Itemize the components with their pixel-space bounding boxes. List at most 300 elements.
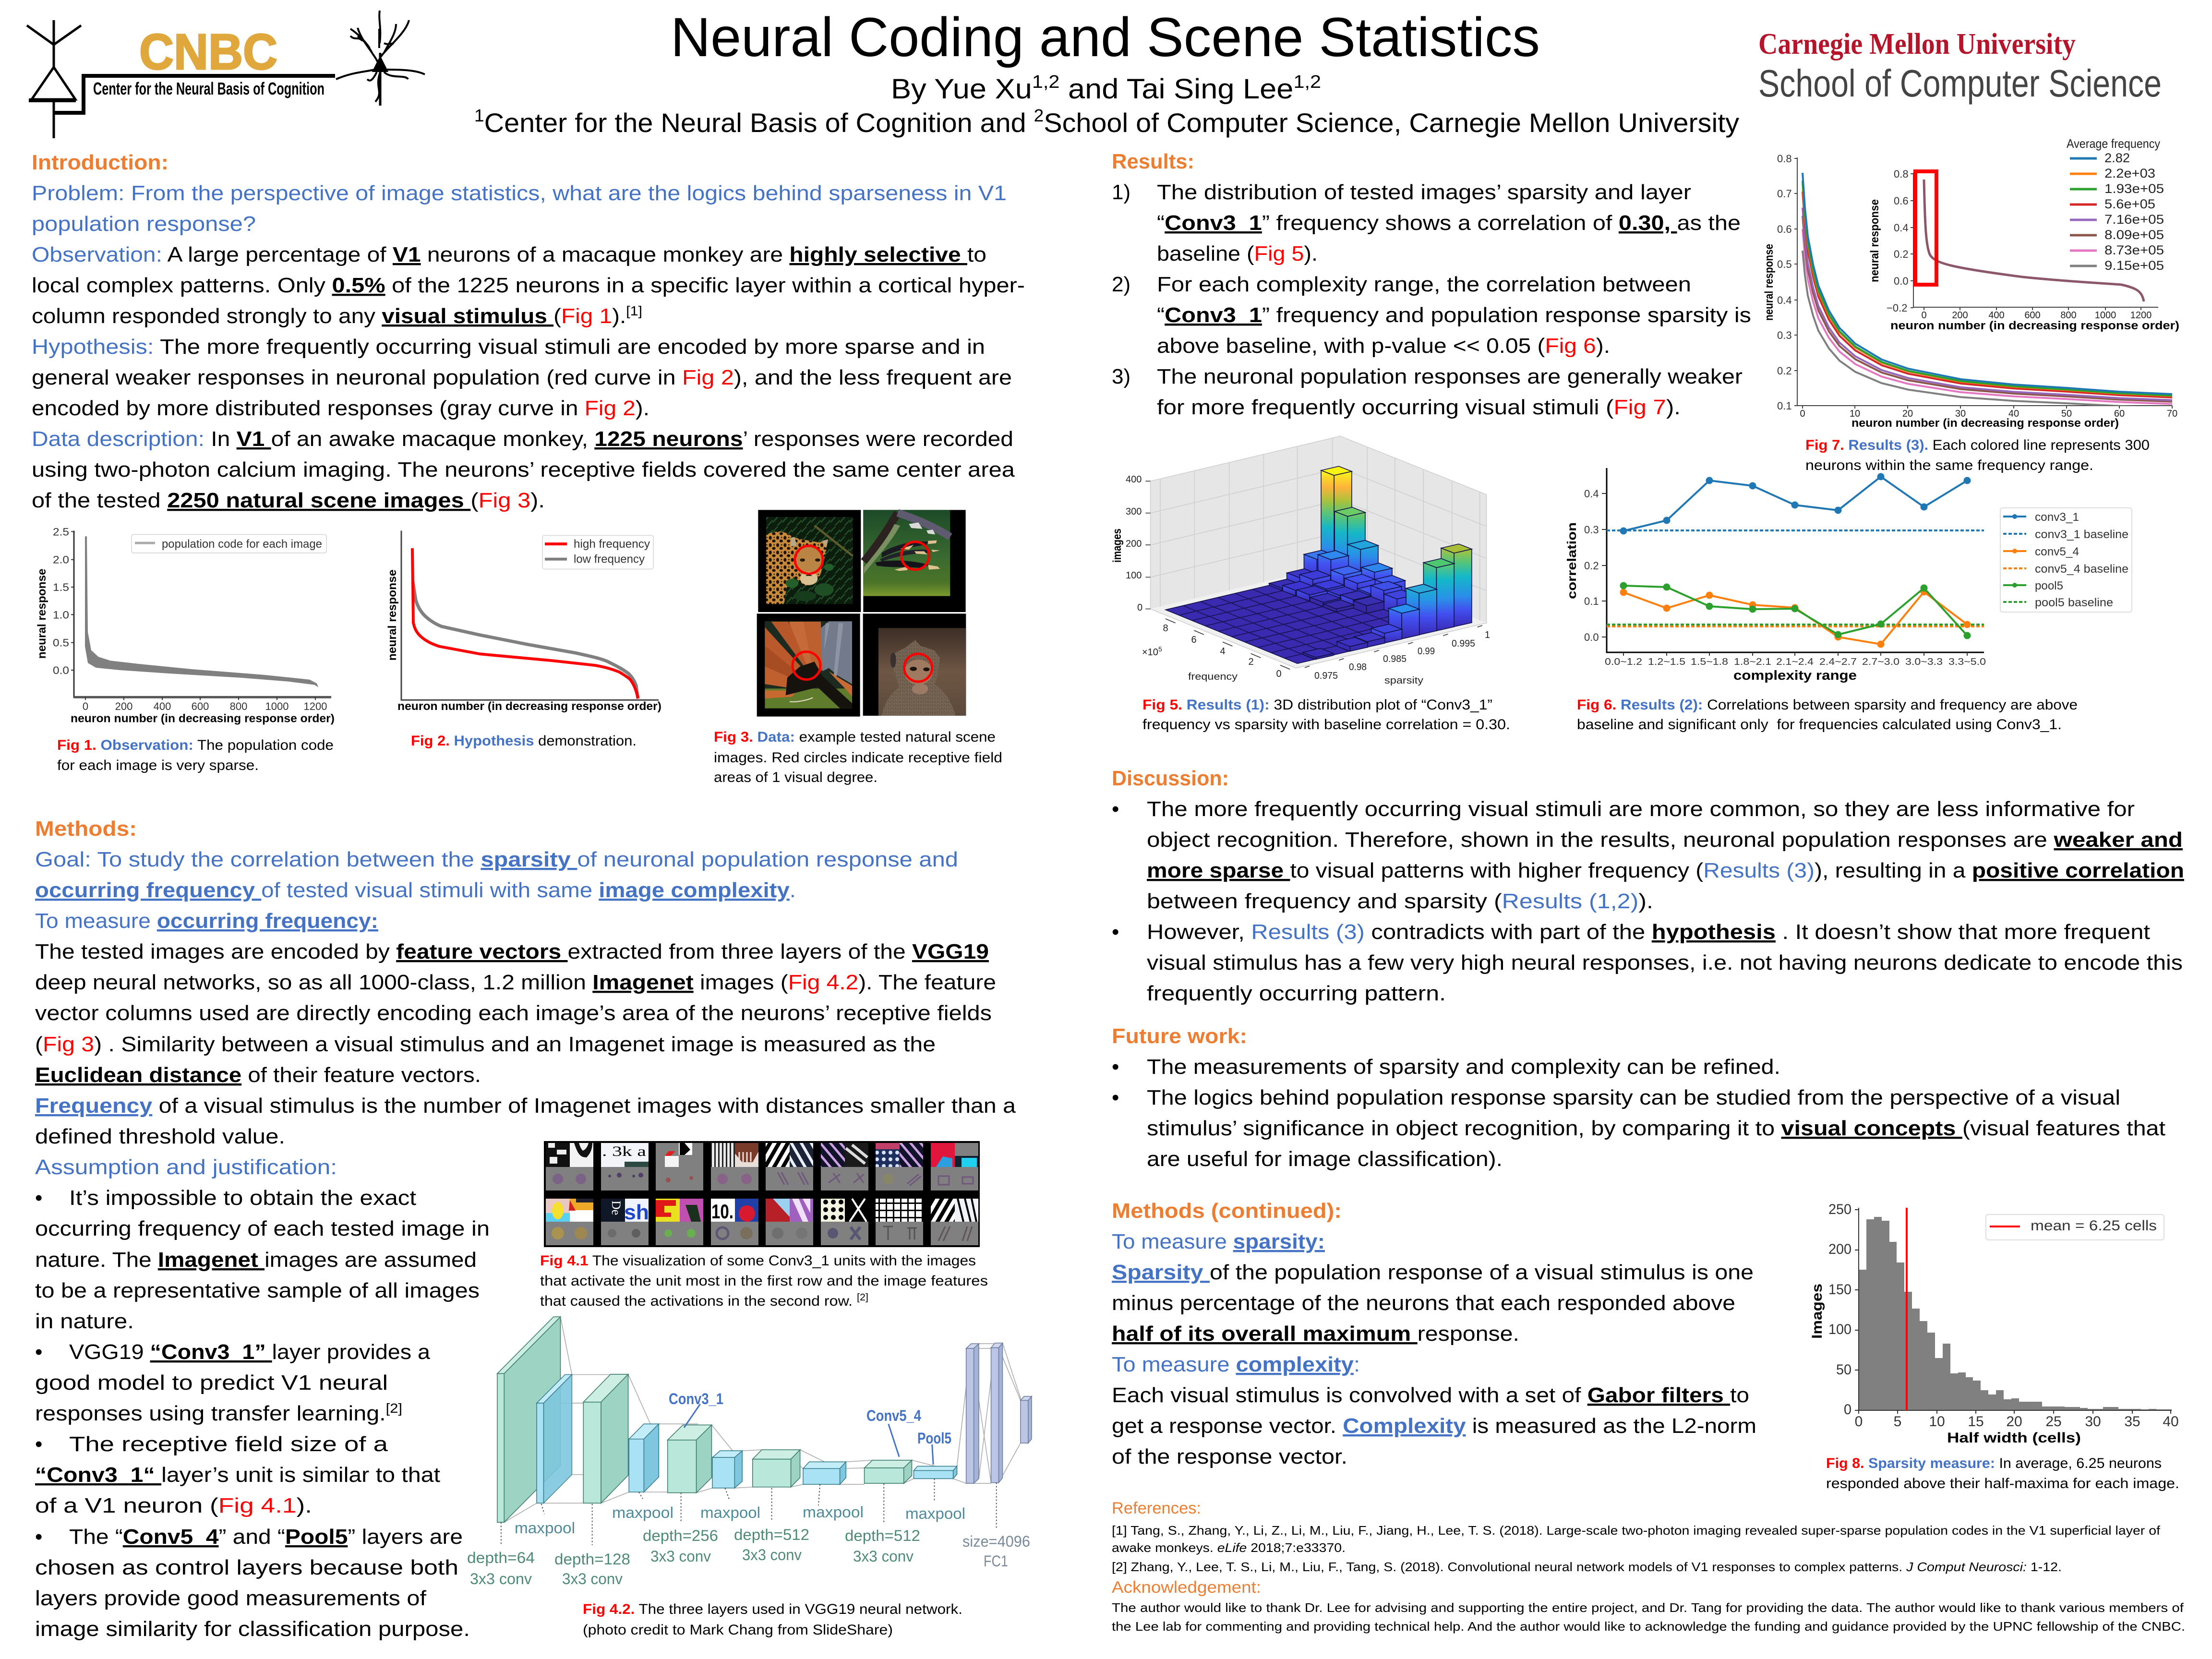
chart: fig 8 histogram: 250 [1828,1202,1851,1217]
diagram: fig 4.2 VGG19 network [467,1317,1032,1587]
diagram: fig 4.2 VGG19 network: size=4096 [962,1533,1030,1550]
authors: 1,2 [1293,72,1321,92]
inset chart: 1200 [2130,310,2152,321]
chart: fig 8 histogram: 25 [2045,1414,2062,1430]
axis labels: 1 [1485,630,1490,640]
diagram: fig 4.2 VGG19 network: depth=256 [643,1527,718,1544]
image: bird feathers [757,613,860,717]
chart: fig 6 correlation: 0.4 [1584,488,1599,500]
axis labels: 0 [1137,602,1142,613]
legend [542,535,653,569]
images: fig 3 natural scenes [757,510,966,717]
chart: fig 8 histogram: Half width (cells) [1947,1430,2081,1446]
caption: fig 8 [1826,1455,2179,1491]
panel: results: For each complexity range, the correlation between [1157,273,1691,296]
panel: methods continued: half of its overall maximum response. [1112,1322,1519,1346]
panel: introduction: Observation: A large percentage of V1 neurons of a macaque monkey are highly selective to [32,243,986,266]
diagram: fig 4.2 VGG19 network: Conv3_1 [669,1390,723,1407]
chart: fig 1 population code: 800 [230,700,247,712]
panel: methods: good model to predict V1 neural [35,1371,388,1395]
legend: 7.16e+05 [2104,212,2164,227]
panel: methods: Euclidean distance of their feature vectors. [35,1063,481,1087]
panel: discussion: more sparse to visual patterns with higher frequency ( Results (3) ), resulting in a positive correlation [1147,859,2184,882]
image: monkey [863,613,966,716]
icon: neuron schematic [27,20,335,138]
affiliations: School of Computer Science, Carnegie Mellon University [1044,108,1739,138]
axis labels: 5 [1158,645,1162,653]
panel: methods [35,817,1016,1641]
panel: methods: • [35,1186,42,1210]
panel: methods: of a V1 neuron ( Fig 4.1 ). [35,1494,312,1517]
chart: fig 1 population code: 1.0 [53,609,69,621]
caption: fig 3 [714,729,1002,785]
chart: fig 6 correlation: complexity range [1733,668,1857,683]
chart: fig 1 population code: 600 [192,700,209,712]
panel: introduction: Hypothesis: The more frequently occurring visual stimuli are encoded by more sparse and in [32,335,985,359]
panel: discussion: between frequency and sparsity ( Results (1,2) ). [1147,890,1653,913]
references: References: [1112,1499,1201,1517]
axis labels: 100 [1126,570,1142,581]
diagram: fig 4.2 VGG19 network: FC1 [984,1552,1008,1570]
affiliations: Center for the Neural Basis of Cognition and [484,108,1034,138]
inset chart: 0.0 [1894,275,1909,287]
caption: fig 8: responded above their half-maxima for each image. [1826,1476,2179,1491]
heading: results: Results: [1112,150,1194,173]
chart: fig 1 population code: 1200 [304,700,327,712]
axis labels: frequency [1188,672,1238,682]
title: Neural Coding and Scene Statistics [671,7,1540,68]
diagram: fig 4.2 VGG19 network: 3x3 conv [470,1570,532,1587]
diagram: fig 4.2 VGG19 network: depth=512 [845,1527,920,1544]
panel: introduction [32,151,1025,512]
chart: fig 7 response curves: 0.8 [1777,153,1792,165]
caption: fig 5: Fig 5. Results (1): 3D distribution plot of “Conv3_1” [1142,697,1492,713]
axis labels: 300 [1126,506,1142,517]
chart: fig 1 population code: 200 [115,700,132,712]
chart: fig 6 correlation: 2.7~3.0 [1862,657,1899,667]
panel: introduction: local complex patterns. Only 0.5% of the 1225 neurons in a specific layer within a cortical hyper- [32,274,1025,297]
panel: introduction: column responded strongly to any visual stimulus (Fig 1). [32,304,625,328]
panel: introduction: Problem: From the perspective of image statistics, what are the logics behind sparseness in V1 [32,181,1007,205]
acknowledgement: The author would like to thank Dr. Lee for advising and supporting the entire project, and Dr. Tang for providing the data. The author would like to thank various members of [1112,1600,2184,1615]
row 1 [546,1143,978,1167]
inset chart: 0.2 [1894,248,1909,260]
diagram: fig 4.2 VGG19 network: 3x3 conv [562,1570,623,1587]
chart: fig 1 population code: 1000 [265,700,289,712]
curves [1803,173,2172,408]
layer blocks [497,1317,1032,1545]
authors: 1,2 [1032,72,1059,92]
legend: high frequency [574,538,650,551]
inset chart: 0.4 [1894,222,1909,234]
chart: fig 8 histogram: 50 [1836,1362,1851,1378]
chart: fig 7 response curves: 0.1 [1777,400,1792,412]
logo: CNBC: CNBC [139,24,277,80]
row 2: 10. [711,1200,733,1223]
heading: methods continued: Methods (continued): [1112,1199,1342,1223]
chart: fig 7 response curves: 0.3 [1777,329,1792,341]
authors: By Yue Xu [891,73,1021,105]
caption: fig 6: baseline and significant only for frequencies calculated using Conv3_1. [1577,717,2062,733]
caption: fig 1 [57,737,334,773]
legend: conv3_1 [2035,511,2079,524]
panel: methods: • [35,1432,42,1456]
chart: fig 7 response curves: 0.4 [1777,294,1792,306]
axis labels: ×10 [1142,647,1158,658]
panel: results: “Conv3_1 ” frequency and population response sparsity is [1157,303,1751,327]
chart: fig 8 histogram: 30 [2085,1414,2101,1430]
panel: results: 1) [1112,180,1130,204]
chart: fig 6 correlation: 3.3~5.0 [1948,657,1986,667]
panel: methods: nature. The Imagenet images are assumed [35,1248,477,1272]
caption: fig 1: Fig 1. Observation: The population code [57,737,334,753]
panel: methods continued [1112,1199,1756,1468]
heading: discussion: Discussion: [1112,767,1229,790]
references: [1] Tang, S., Zhang, Y., Li, Z., Li, M., Liu, F., Jiang, H., Lee, T. S. (2018). Large-scale two-photon imaging revealed super-sparse population codes in the V1 superficial layer of [1112,1523,2161,1538]
caption: fig 4.2: (photo credit to Mark Chang from SlideShare) [583,1622,893,1638]
caption: fig 3: Fig 3. Data: example tested natural scene [714,729,996,745]
panel: introduction: Data description: In V1 of an awake macaque monkey, 1225 neurons ’ responses were recorded [32,427,1013,451]
panel: methods continued: minus percentage of the neurons that each responded above [1112,1291,1735,1315]
panel: methods: To measure occurring frequency: [35,909,378,933]
inset chart [1868,168,2179,332]
affiliations: 1 [474,106,484,125]
logo: Carnegie Mellon University: Carnegie Mellon University [1758,28,2076,60]
chart: fig 8 histogram: 0 [1855,1414,1863,1430]
panel: methods: layers provide good measurements of [35,1587,427,1610]
axis labels: 0 [1276,669,1282,679]
panel: methods: “Conv3_1“ layer’s unit is similar to that [35,1463,440,1487]
panel: methods: to be a representative sample of all images [35,1279,480,1302]
axis labels: 0.99 [1418,646,1435,657]
row 1: . 3k a [602,1143,646,1159]
panel: methods continued: get a response vector. Complexity is measured as the L2-norm [1112,1414,1756,1438]
diagram: fig 4.2 VGG19 network: maxpool [515,1519,575,1537]
feature blobs [552,1172,973,1241]
chart: fig 1 population code: 2.5 [53,526,69,538]
caption: fig 7: Fig 7. Results (3). Each colored line represents 300 [1805,437,2150,453]
chart: fig 6 correlation: 1.5~1.8 [1691,657,1728,667]
caption: fig 5: frequency vs sparsity with baseline correlation = 0.30. [1142,717,1510,733]
inset chart: −0.2 [1887,302,1907,314]
panel: future work: • [1112,1055,1119,1079]
axis labels: images [1111,529,1124,563]
axis labels: 8 [1163,623,1168,634]
chart: fig 1 population code: neural response [36,569,48,659]
panel: introduction: population response? [32,212,256,236]
axis labels: 400 [1126,474,1142,485]
chart: fig 6 correlation: 0.0 [1584,631,1599,643]
axis labels: 2 [1248,657,1254,667]
chart: fig 1 population code: 400 [154,700,171,712]
inset chart: 1000 [2095,310,2116,321]
panel: future work: The measurements of sparsity and complexity can be refined. [1147,1055,1780,1079]
chart: fig 8 histogram: 100 [1828,1322,1851,1337]
legend [2000,508,2132,612]
panel: results: 2) [1112,273,1130,296]
affiliations: 2 [1034,106,1044,125]
chart: fig 7 response curves: 0.2 [1777,365,1792,377]
panel: methods: Assumption and justification: [35,1155,337,1179]
chart: fig 7 response curves: neuron number (in decreasing response order) [1851,417,2119,430]
acknowledgement [1112,1578,2185,1634]
chart: fig 8 histogram: 0 [1844,1402,1851,1418]
chart: fig 7 response curves [1763,136,2179,430]
chart: fig 1 population code: neuron number (in decreasing response order) [71,712,335,725]
diagram: fig 4.2 VGG19 network: maxpool [905,1505,965,1522]
axis labels: 200 [1126,539,1142,549]
panel: methods: Frequency of a visual stimulus is the number of Imagenet images with distances smaller than a [35,1094,1016,1118]
walls and floor [1145,436,1487,669]
caption: fig 4.2: Fig 4.2. The three layers used in VGG19 neural network. [583,1601,962,1617]
series conv5_4 [1620,589,1971,648]
chart: fig 7 response curves: 0.6 [1777,223,1792,235]
images: fig 4.1 unit visualizations [544,1141,980,1247]
caption: fig 4.1: Fig 4.1 The visualization of some Conv3_1 units with the images [540,1253,976,1269]
caption: fig 4.2 [583,1601,962,1638]
panel: discussion: object recognition. Therefore, shown in the results, neuronal population responses are weaker and [1147,828,2183,852]
panel: methods: chosen as control layers because both [35,1556,458,1579]
diagram: fig 4.2 VGG19 network: depth=512 [734,1526,809,1543]
panel: future work: are useful for image classification). [1147,1147,1503,1171]
caption: fig 3: areas of 1 visual degree. [714,769,878,785]
panel: future work: The logics behind population response sparsity can be studied from the perspective of a visual [1147,1086,2120,1109]
acknowledgement: Acknowledgement: [1112,1578,1261,1597]
legend: mean = 6.25 cells [2031,1218,2157,1234]
diagram: fig 4.2 VGG19 network: Conv5_4 [866,1407,921,1424]
diagram: fig 4.2 VGG19 network: maxpool [700,1504,760,1521]
axis labels: 0.985 [1383,654,1407,664]
panel: methods continued: To measure complexity : [1112,1353,1360,1376]
chart: fig 2 hypothesis: neuron number (in decreasing response order) [397,700,661,713]
chart: fig 6 correlation: 3.0~3.3 [1905,657,1943,667]
panel: methods: Goal: To study the correlation between the sparsity of neuronal population response and [35,848,958,871]
legend: low frequency [574,553,645,566]
panel: discussion: However, Results (3) contradicts with part of the hypothesis . It doesn’t show that more frequent [1147,920,2150,944]
series pool5 [1620,582,1971,639]
logo: CNBC: Center for the Neural Basis of Cognition [93,79,325,98]
diagram: fig 4.2 VGG19 network: maxpool [612,1504,673,1521]
panel: introduction: encoded by more distributed responses (gray curve in Fig 2). [32,397,649,420]
axis labels: 0.975 [1314,671,1338,681]
baselines [1607,530,1984,626]
legend: conv5_4 [2035,545,2079,558]
inset chart: neuron number (in decreasing response order) [1890,319,2179,332]
panel: methods: It’s impossible to obtain the exact [69,1186,416,1210]
caption: fig 3: images. Red circles indicate receptive field [714,750,1002,766]
caption: fig 2: Fig 2. Hypothesis demonstration. [411,733,637,749]
panel: discussion [1112,767,2184,1005]
panel: methods: occurring frequency of tested visual stimuli with same image complexity . [35,878,796,902]
legend: pool5 [2035,579,2063,592]
chart: fig 6 correlation: 0.3 [1584,524,1599,536]
panel: future work [1112,1024,2165,1171]
inset chart: 400 [1988,310,2005,321]
chart: fig 1 population code: 2.0 [53,554,69,566]
panel: introduction: of the tested 2250 natural scene images (Fig 3). [32,489,545,512]
image: insect on branch [863,510,966,612]
panel: methods: The tested images are encoded by feature vectors extracted from three layers of the VGG19 [35,940,989,963]
references: [2] Zhang, Y., Lee, T. S., Li, M., Liu, F., Tang, S. (2018). Convolutional neural network models of V1 responses to complex patterns. J Comput Neurosci: 1-12. [1112,1560,2062,1574]
references: awake monkeys. eLife 2018;7:e33370. [1112,1540,1346,1555]
caption: fig 6: Fig 6. Results (2): Correlations between sparsity and frequency are above [1577,697,2078,713]
inset chart: 0.8 [1894,168,1909,180]
diagram: fig 4.2 VGG19 network: depth=128 [554,1551,630,1568]
chart: fig 6 correlation [1564,468,2132,683]
panel: results: 3) [1112,365,1130,388]
legend: 5.6e+05 [2104,197,2155,211]
panel: methods: in nature. [35,1310,134,1333]
panel: methods: occurring frequency of each tested image in [35,1217,490,1240]
panel: discussion: • [1112,797,1119,821]
inset chart: 0 [1921,310,1927,321]
axis labels: 0.995 [1452,638,1475,649]
chart: fig 6 correlation: 1.2~1.5 [1648,657,1685,667]
legend: Average frequency [2067,136,2160,151]
legend [1986,1214,2164,1240]
chart: fig 7 response curves: 30 [1955,409,1966,419]
chart: fig 8 histogram: 15 [1968,1414,1984,1430]
diagram: fig 4.2 VGG19 network: 3x3 conv [853,1548,914,1565]
legend: 8.09e+05 [2104,228,2164,242]
panel: methods: [2] [386,1401,402,1416]
chart: fig 7 response curves: 0 [1800,409,1805,419]
panel: methods: The “Conv5_4 ” and “ Pool5” layers are [69,1525,463,1549]
axis labels [1111,474,1490,686]
logo: CNBC [27,11,425,138]
chart: fig 8 histogram [1809,1202,2179,1446]
chart: fig 7 response curves: 10 [1850,409,1860,419]
caption: fig 4.1: that caused the activations in the second row. [540,1293,830,1309]
panel: results: The distribution of tested images’ sparsity and layer [1157,180,1691,204]
bars [1166,466,1472,663]
legend: 1.93e+05 [2104,181,2164,196]
chart: fig 8 histogram: 150 [1828,1282,1851,1298]
panel: results: The neuronal population responses are generally weaker [1157,365,1743,388]
legend: 2.82 [2104,151,2130,165]
panel: results: baseline ( Fig 5). [1157,242,1318,265]
series conv3_1 [1620,473,1971,534]
panel: results: above baseline, with p-value << 0.05 ( Fig 6). [1157,334,1610,358]
panel: introduction: general weaker responses in neuronal population (red curve in Fig 2), and the less frequent are [32,366,1012,389]
panel: methods: VGG19 “Conv3_1” layer provides a [69,1340,431,1364]
legend: 8.73e+05 [2104,243,2164,257]
chart: fig 1 population code [36,526,335,725]
chart: fig 6 correlation: 0.0~1.2 [1605,657,1642,667]
axis labels: 4 [1220,646,1226,657]
panel: methods continued: Sparsity of the population response of a visual stimulus is one [1112,1261,1754,1284]
panel: discussion: frequently occurring pattern. [1147,982,1446,1005]
legend: 9.15e+05 [2104,258,2164,273]
chart: fig 2 hypothesis: neural response [386,569,399,661]
panel: methods: defined threshold value. [35,1125,285,1148]
highlight: red box [1915,171,1936,285]
inset chart: 600 [2024,310,2041,321]
inset chart: 800 [2060,310,2077,321]
chart: fig 8 histogram: 20 [2006,1414,2022,1430]
panel: methods: vector columns used are directly encoding each image’s area of the neurons’ receptive fields [35,1001,992,1025]
bars [1859,1217,2172,1410]
heading: future work: Future work: [1112,1024,1247,1048]
image: jaguar [758,510,861,612]
panel: methods continued: of the response vector. [1112,1445,1347,1468]
panel: introduction: [1] [626,303,642,318]
caption: fig 7: neurons within the same frequency range. [1805,457,2093,473]
panel: methods: responses using transfer learning. [35,1402,353,1425]
chart: fig 7 response curves: 0.7 [1777,188,1792,200]
panel: results: “Conv3_1 ” frequency shows a correlation of 0.30, as the [1157,211,1741,235]
panel: future work: • [1112,1086,1119,1109]
panel: results [1112,150,1751,419]
legend: conv3_1 baseline [2035,528,2128,541]
caption: fig 4.1 [540,1253,988,1309]
row 2: sh [624,1201,649,1224]
chart: fig 7 response curves: neural response [1763,244,1776,321]
axis labels: sparsity [1384,675,1423,686]
panel: methods: The receptive field size of a [69,1432,388,1456]
row 2 [546,1199,978,1224]
diagram: fig 4.2 VGG19 network: 3x3 conv [650,1548,711,1565]
legend [132,534,326,553]
chart: fig 1 population code: 0 [83,700,88,712]
chart: fig 8 histogram: 35 [2124,1414,2140,1430]
chart: fig 8 histogram: 200 [1828,1241,1851,1257]
heading: introduction: Introduction: [32,151,168,174]
caption: fig 8: Fig 8. Sparsity measure: In average, 6.25 neurons [1826,1455,2162,1471]
chart: fig 7 response curves: 40 [2008,409,2019,419]
chart: fig 8 histogram: 10 [1929,1414,1945,1430]
caption: fig 4.1: that activate the unit most in the first row and the image features [540,1273,988,1289]
chart: fig 6 correlation: 1.8~2.1 [1734,657,1771,667]
legend: population code for each image [162,538,322,551]
chart: fig 8 histogram: Images [1809,1284,1825,1339]
panel: methods continued: Each visual stimulus is convolved with a set of Gabor filters to [1112,1383,1749,1407]
authors: and Tai Sing Lee [1059,73,1293,105]
legend: conv5_4 baseline [2035,563,2128,576]
chart: fig 6 correlation: 2.1~2.4 [1776,657,1814,667]
chart: fig 7 response curves: 0.5 [1777,258,1792,270]
inset chart: 0.6 [1894,195,1909,207]
legend: 2.2e+03 [2104,166,2155,180]
chart: fig 1 population code: 0.0 [53,664,69,676]
area: response band [85,536,319,689]
panel: methods: image similarity for classification purpose. [35,1617,470,1641]
diagram: fig 4.2 VGG19 network: depth=64 [467,1549,535,1566]
chart: fig 8 histogram: 5 [1894,1414,1901,1430]
panel: discussion: The more frequently occurring visual stimuli are more common, so they are less informative for [1147,797,2135,821]
panel: discussion: • [1112,920,1119,944]
chart: fig 6 correlation: correlation [1564,522,1579,599]
inset chart: neural response [1868,199,1881,282]
axis labels: 0.98 [1349,662,1367,673]
icon: pyramidal neuron [336,11,425,106]
logo: Carnegie Mellon University [1758,28,2162,105]
caption: fig 7 [1805,437,2150,473]
references [1112,1499,2161,1574]
diagram: fig 4.2 VGG19 network: maxpool [803,1503,864,1521]
chart: fig 5 3D distribution [1111,436,1490,686]
mean line [1906,1208,1908,1410]
chart: fig 1 population code: 1.5 [53,581,69,593]
row 2: De [609,1201,623,1215]
chart: fig 7 response curves: 60 [2114,409,2125,419]
panel: results: for more frequently occurring visual stimuli ( Fig 7 ). [1157,396,1681,419]
heading: methods: Methods: [35,817,137,841]
diagram: fig 4.2 VGG19 network: Pool5 [917,1430,951,1447]
chart: fig 7 response curves: 70 [2167,409,2177,419]
chart: fig 7 response curves: 20 [1902,409,1913,419]
chart: fig 1 population code: 0.5 [53,637,69,649]
